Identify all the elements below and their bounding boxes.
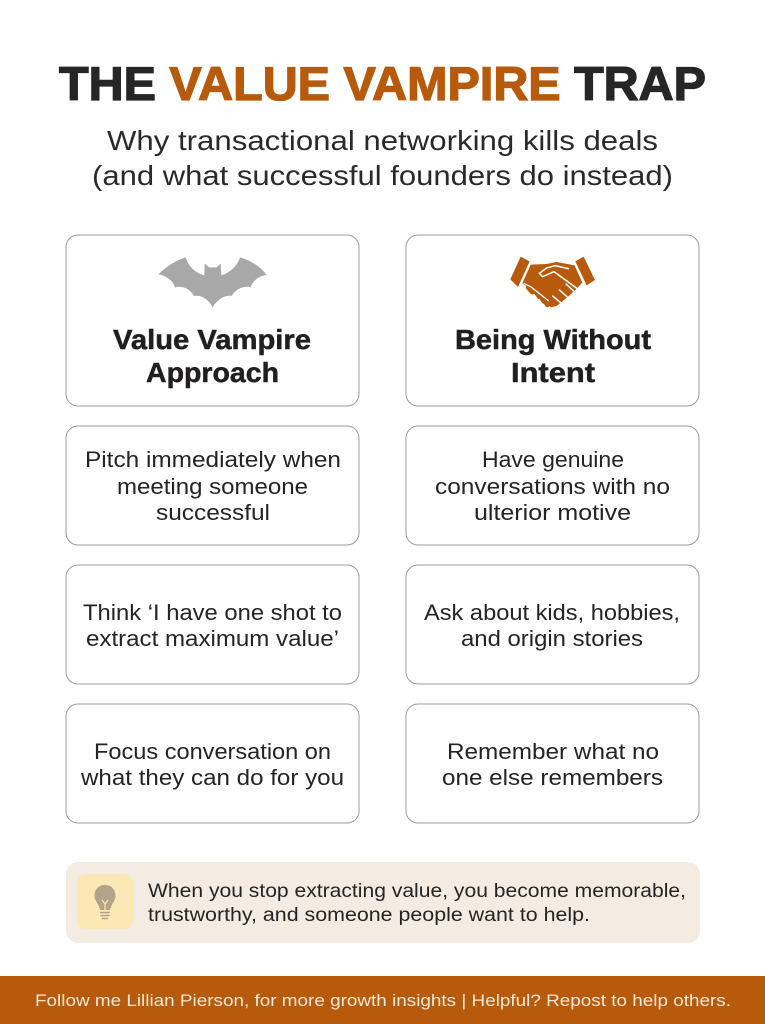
panel: genuine conversations <box>406 426 699 545</box>
panel: one shot <box>66 565 359 684</box>
callout text <box>148 881 686 926</box>
subtitle: Why transactional networking kills deals <box>107 125 658 156</box>
panel: one shot: Think ‘I have one shot to <box>83 600 342 625</box>
panel: remember <box>406 704 699 823</box>
footer bar <box>0 976 765 1024</box>
panel: remember: Remember what no <box>447 739 659 764</box>
panel: genuine conversations: ulterior motive <box>474 500 631 525</box>
panel: kids and hobbies: and origin stories <box>461 626 643 651</box>
panel: pitch immediately: Pitch immediately when <box>85 447 341 472</box>
footer text: Follow me Lillian Pierson, for more growth insights | Helpful? Repost to help others. <box>35 991 731 1010</box>
heading: value vampire approach <box>113 324 311 388</box>
panel: genuine conversations: Have genuine <box>482 447 624 472</box>
panel: remember: one else remembers <box>442 765 663 790</box>
panel: pitch immediately: successful <box>156 500 270 525</box>
panel: focus conversation <box>66 704 359 823</box>
panel: genuine conversations: conversations with no <box>435 474 670 499</box>
panel: focus conversation: what they can do for you <box>80 765 344 790</box>
heading: being without intent: Being Without <box>455 324 651 355</box>
panel: being without intent header <box>406 235 699 406</box>
subtitle <box>92 125 673 191</box>
callout text: When you stop extracting value, you become memorable, <box>148 881 686 902</box>
panel: kids and hobbies <box>406 565 699 684</box>
callout <box>66 862 700 943</box>
panel: one shot: extract maximum value’ <box>86 626 339 651</box>
heading: value vampire approach: Approach <box>146 357 279 388</box>
panel: value vampire approach header <box>66 235 359 406</box>
panel: kids and hobbies: Ask about kids, hobbies, <box>424 600 680 625</box>
icon: light bulb <box>77 874 133 929</box>
icon: handshake <box>510 257 595 307</box>
callout text: trustworthy, and someone people want to help. <box>148 905 590 926</box>
subtitle: (and what successful founders do instead) <box>92 160 673 191</box>
panel: pitch immediately <box>66 426 359 545</box>
heading: value vampire approach: Value Vampire <box>113 324 311 355</box>
icon: bat <box>158 257 267 307</box>
title: THE VALUE VAMPIRE TRAP <box>59 57 706 110</box>
panel: pitch immediately: meeting someone <box>117 474 308 499</box>
panel: focus conversation: Focus conversation on <box>94 739 331 764</box>
heading: being without intent <box>455 324 651 388</box>
heading: being without intent: Intent <box>511 357 595 388</box>
